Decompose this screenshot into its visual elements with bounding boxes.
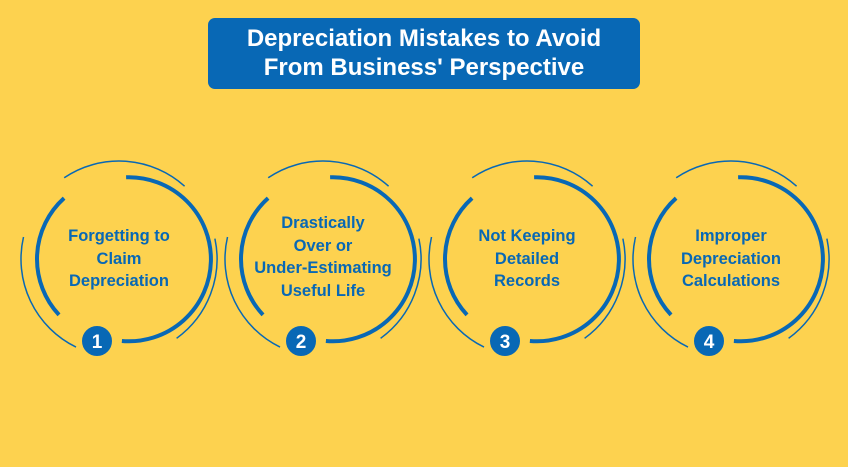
badge 4 bbox=[693, 325, 725, 357]
badge 1: 1 bbox=[92, 332, 103, 353]
text 3: Detailed bbox=[495, 250, 559, 268]
text 4: Calculations bbox=[682, 272, 780, 290]
title: From Business' Perspective bbox=[264, 54, 584, 81]
badge 1 bbox=[81, 325, 113, 357]
text 2: Under-Estimating bbox=[254, 259, 392, 277]
title: Depreciation Mistakes to Avoid bbox=[247, 25, 601, 52]
text 1: Forgetting to bbox=[68, 227, 170, 245]
text 2: Useful Life bbox=[281, 282, 365, 300]
text 4: Improper bbox=[695, 227, 767, 245]
text 1 bbox=[68, 227, 170, 290]
ring 1 bbox=[21, 161, 217, 347]
text 3: Not Keeping bbox=[478, 227, 576, 245]
badge 3 bbox=[489, 325, 521, 357]
badge 2 bbox=[285, 325, 317, 357]
text 3: Records bbox=[494, 272, 560, 290]
text 1: Depreciation bbox=[69, 272, 169, 290]
text 4 bbox=[681, 227, 781, 290]
ring 2 bbox=[225, 161, 421, 347]
badge 2: 2 bbox=[296, 332, 306, 353]
badge 3: 3 bbox=[500, 332, 510, 353]
text 4: Depreciation bbox=[681, 250, 781, 268]
text 2 bbox=[254, 214, 392, 300]
text 2: Over or bbox=[294, 236, 352, 254]
ring 4 bbox=[633, 161, 829, 347]
text 1: Claim bbox=[97, 250, 141, 268]
text 2: Drastically bbox=[281, 214, 365, 232]
badge 4: 4 bbox=[704, 332, 715, 353]
ring 3 bbox=[429, 161, 625, 347]
title bbox=[208, 18, 640, 89]
text 3 bbox=[478, 227, 576, 290]
